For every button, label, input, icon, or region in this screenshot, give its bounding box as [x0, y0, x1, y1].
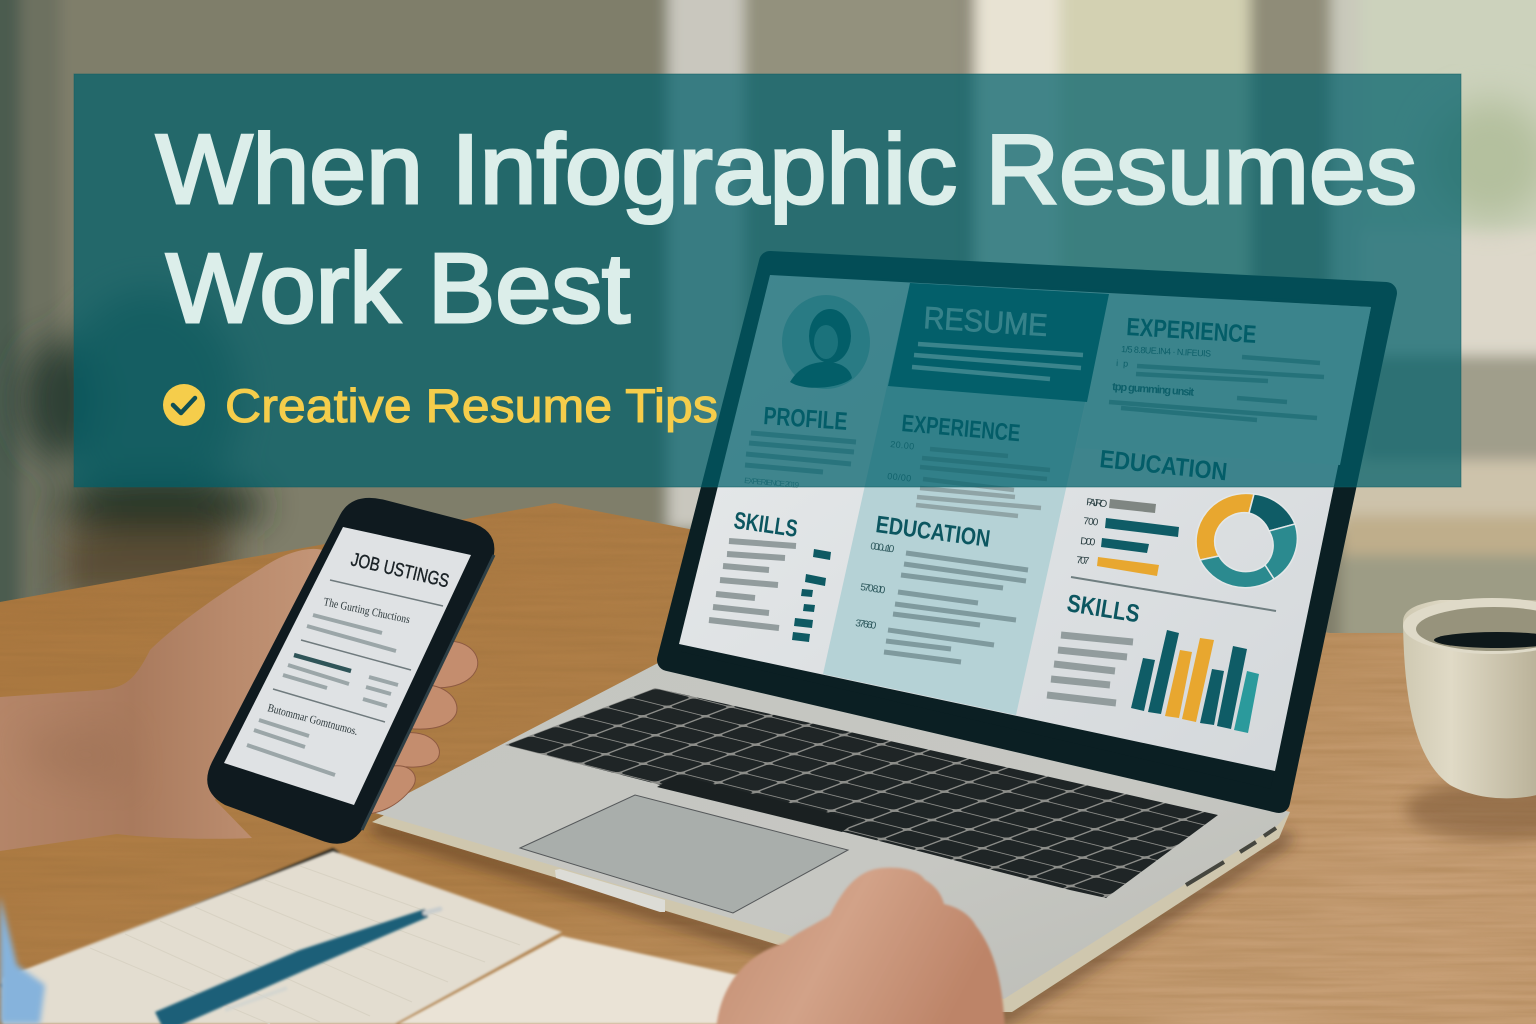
skills left markers — [792, 549, 831, 642]
chart labels: PAJRO — [1086, 497, 1108, 510]
resume header lines — [912, 344, 1083, 379]
education year labels: 570 8J0 — [860, 582, 886, 597]
wrist shadow — [20, 722, 130, 790]
left hand back fingers — [355, 641, 478, 815]
education year labels: 37660 — [855, 618, 877, 632]
phone highlighted line — [294, 655, 351, 671]
skills right lines — [1047, 635, 1133, 703]
pen — [155, 909, 440, 1024]
notebook — [0, 848, 742, 1024]
wooden table — [0, 500, 1536, 1024]
skills divider — [1071, 577, 1276, 611]
window foliage — [1430, 100, 1536, 220]
horizontal bar chart — [1097, 499, 1179, 576]
phone — [207, 498, 494, 844]
banner panel — [74, 74, 1461, 487]
phone text two: Butommar Gomtnumos. — [266, 702, 359, 738]
ports — [1186, 828, 1276, 885]
icon: check badge — [163, 384, 205, 426]
chart labels: D00 — [1080, 536, 1096, 549]
space bar — [657, 775, 858, 832]
column chart — [1131, 630, 1259, 733]
sleeve — [0, 896, 45, 1024]
display — [679, 275, 1371, 771]
thumb notch — [555, 869, 665, 912]
chart labels: 700 — [1083, 516, 1099, 529]
heading: skills left: SKILLS — [732, 507, 799, 543]
laptop — [372, 262, 1386, 1012]
background plant — [20, 290, 265, 600]
cup shadow — [1405, 780, 1536, 840]
title line one: When Infographic Resumes — [156, 114, 1417, 224]
education year labels: 00.0u10 — [870, 541, 895, 555]
left hand palm and arm — [0, 549, 330, 851]
skills left lines — [709, 541, 796, 628]
small profile text: EXPERIENCE 2019 — [744, 476, 800, 490]
right hand — [716, 868, 1005, 1024]
background room — [0, 0, 1536, 670]
small experience labels: 00/00 — [887, 471, 912, 483]
experience lines — [916, 449, 1050, 516]
column 3 tint — [1076, 294, 1371, 465]
column 2 tint — [823, 283, 1109, 715]
education year labels — [855, 541, 895, 632]
heading: education middle: EDUCATION — [874, 511, 992, 553]
display background — [679, 275, 1371, 771]
phone dividers — [273, 580, 443, 722]
phone text one: The Gurting Chuctions — [322, 596, 411, 626]
heading: experience right: EXPERIENCE — [1126, 313, 1257, 349]
chart labels — [1076, 497, 1108, 567]
phone screen — [224, 527, 471, 805]
small experience right text: 1/5 8.8UE.IN4 · N.IFEUIS — [1121, 344, 1211, 359]
profile lines — [745, 433, 856, 472]
trackpad — [520, 795, 848, 913]
chart labels: 707 — [1076, 555, 1090, 567]
small experience right text: ip — [1116, 358, 1128, 369]
heading: experience middle: EXPERIENCE — [900, 410, 1021, 447]
heading: skills right: SKILLS — [1065, 589, 1142, 628]
small experience labels — [887, 439, 915, 483]
phone heading: JOB USTINGS — [349, 549, 451, 592]
donut chart — [1196, 493, 1297, 588]
subtitle: Creative Resume Tips — [225, 379, 718, 432]
title line two: Work Best — [166, 233, 630, 343]
small experience labels: 20.00 — [890, 439, 915, 451]
heading: resume: RESUME — [923, 300, 1049, 343]
heading: profile: PROFILE — [763, 402, 848, 436]
heading: education right: EDUCATION — [1098, 445, 1229, 486]
avatar — [782, 295, 870, 389]
education lines — [884, 553, 1028, 662]
ruled lines — [90, 866, 520, 1024]
laptop base — [372, 662, 1290, 1012]
small experience right text: tpp gumming unsit — [1112, 381, 1195, 399]
phone edge highlight — [362, 555, 494, 830]
experience right lines — [1109, 357, 1324, 420]
screen bezel — [668, 262, 1386, 802]
keyboard — [505, 688, 1218, 898]
laptop shadow — [372, 826, 1290, 1018]
phone lines — [247, 615, 398, 775]
small experience right text — [1112, 344, 1211, 399]
resume header block — [888, 283, 1109, 402]
coffee cup — [1403, 598, 1536, 798]
